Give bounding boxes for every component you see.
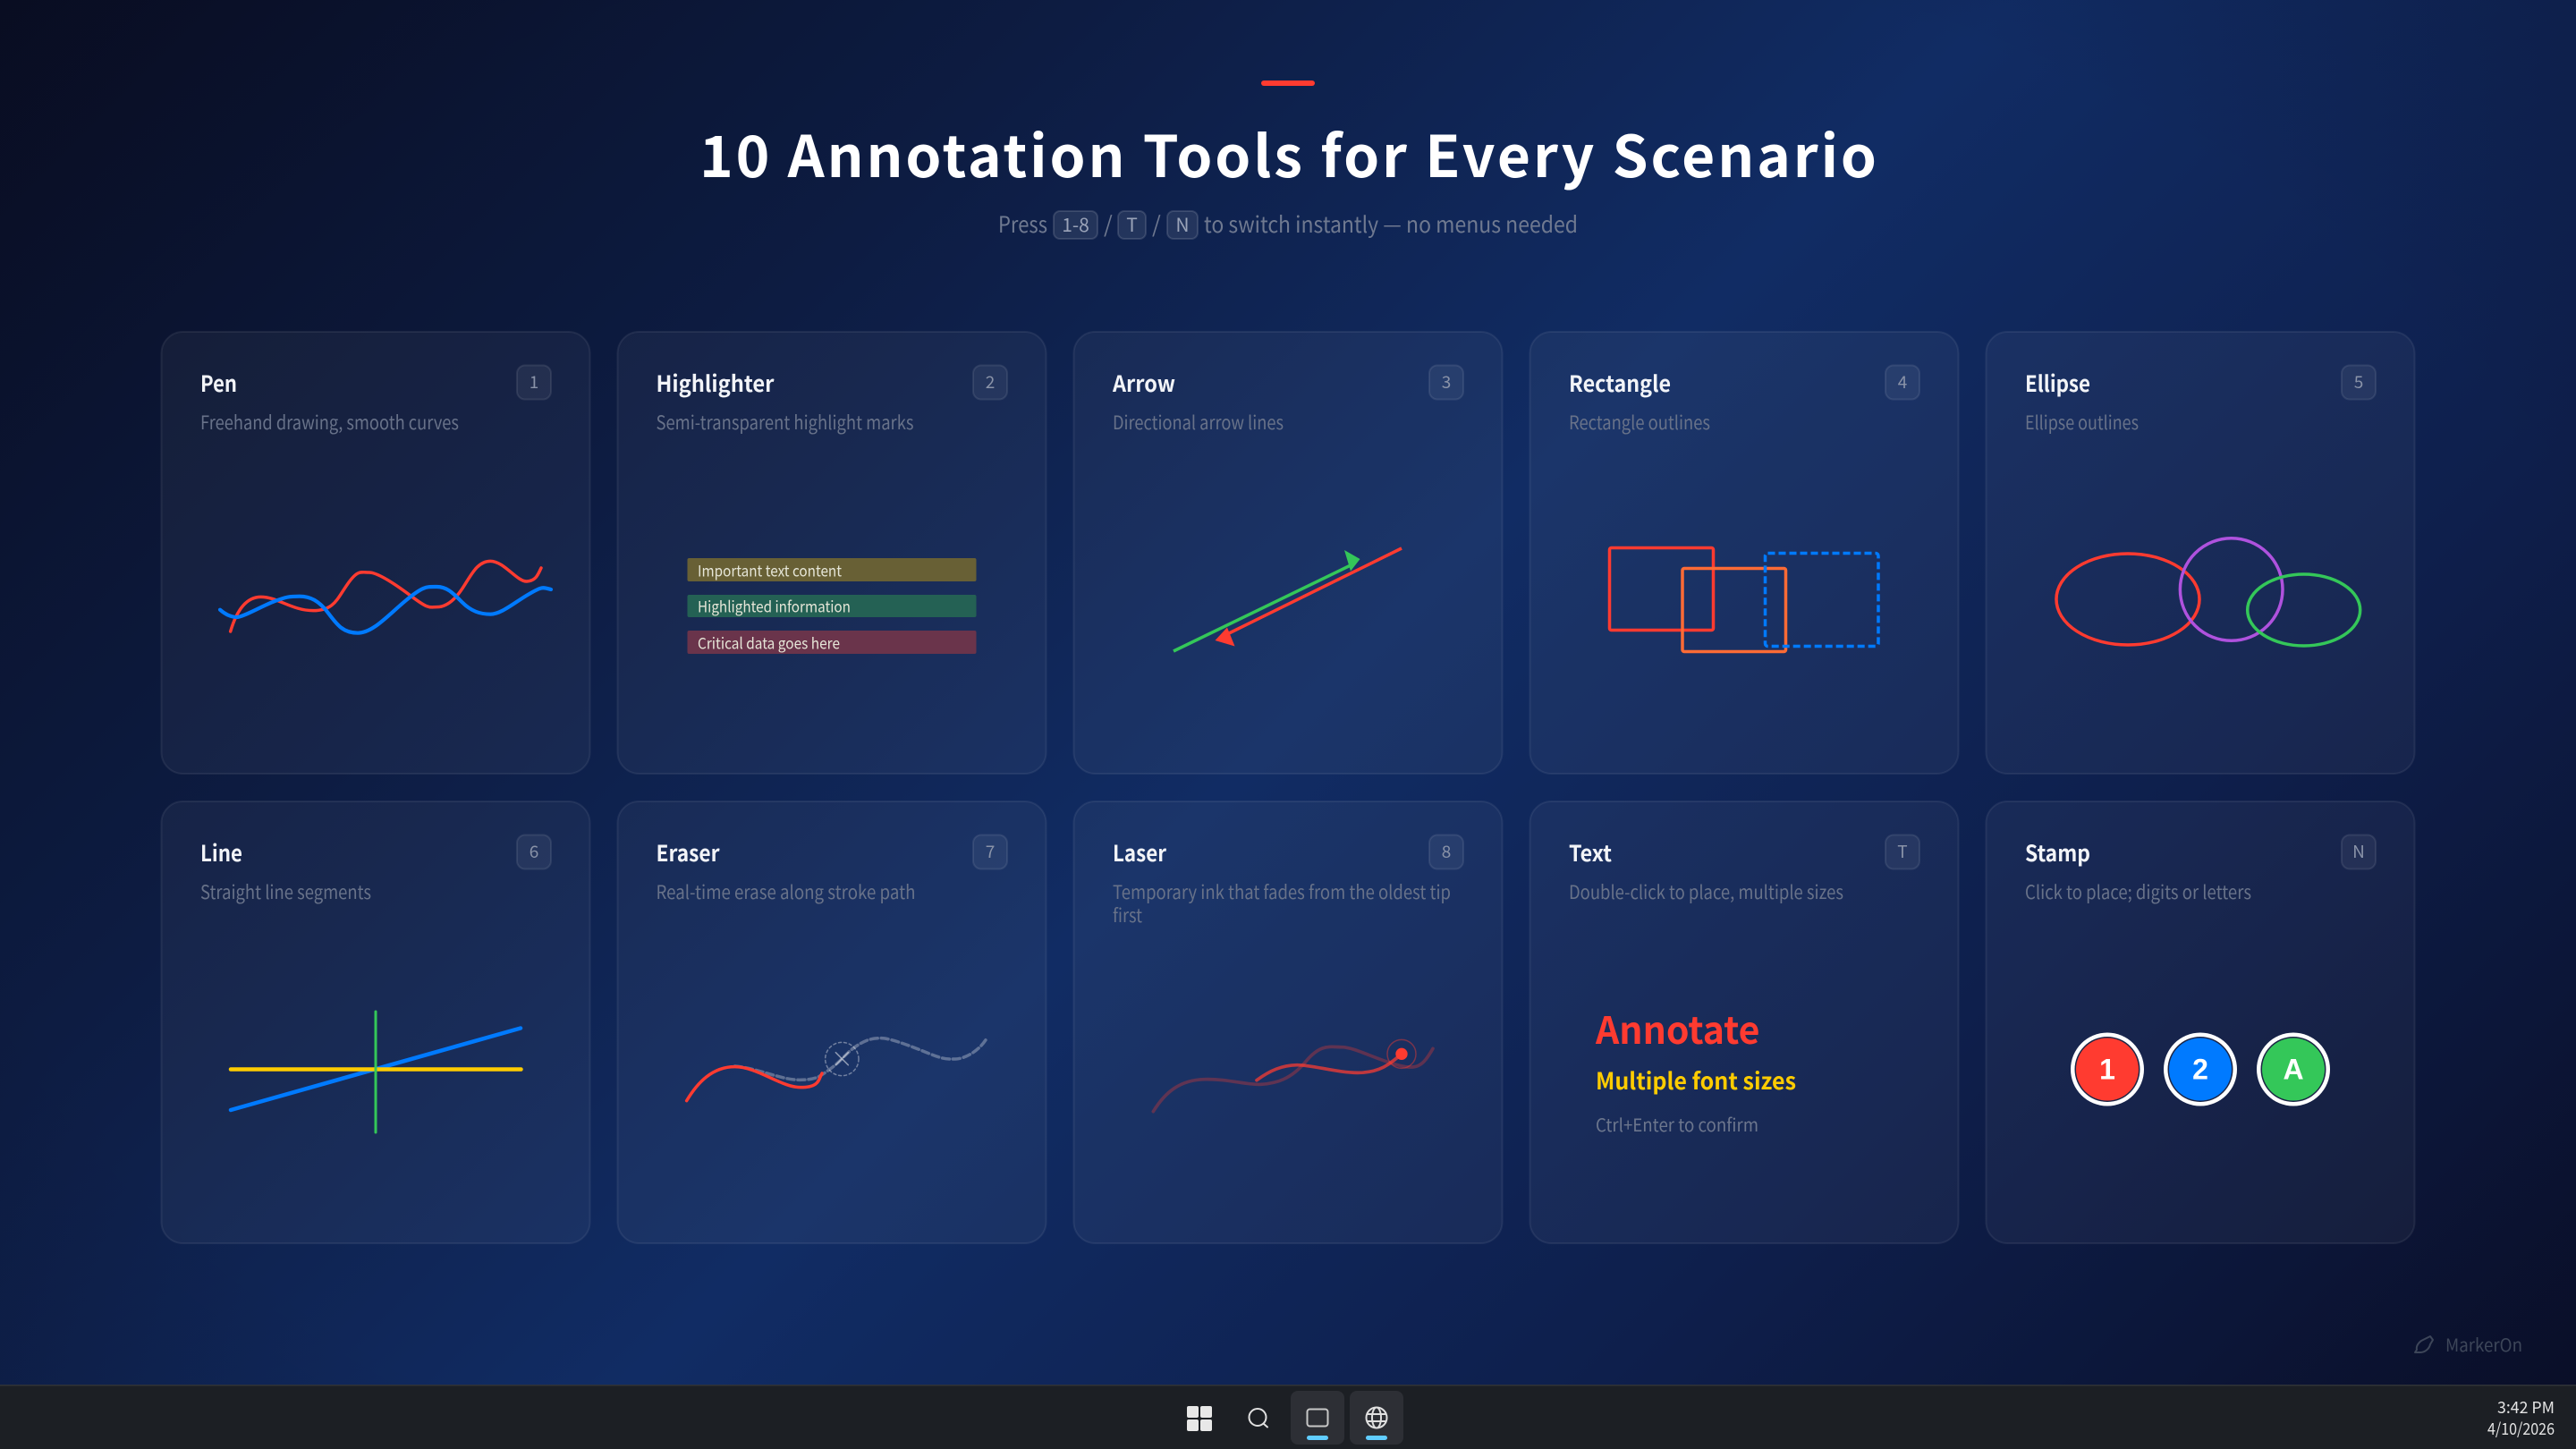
shape: dashed blue rectangle: [1766, 553, 1878, 646]
key badge: 5: [2342, 365, 2376, 399]
description: Laser: [1113, 878, 1451, 928]
key badge: 4: 4: [1898, 369, 1907, 394]
panel: Text: [1530, 801, 1959, 1243]
subtitle with key hints: [998, 208, 1578, 240]
sample: Annotate: Annotate: [1595, 1001, 1760, 1055]
heading: Stamp: Stamp: [2025, 836, 2090, 869]
clock: 4/10/2026: [2487, 1417, 2555, 1440]
description: Eraser: Real-time erase along stroke path: [657, 878, 916, 905]
accent bar: [1261, 80, 1315, 86]
description: Laser: first: [1113, 902, 1142, 928]
stamp: A: A: [2283, 1054, 2304, 1086]
description: Arrow: Directional arrow lines: [1113, 409, 1284, 436]
key badge: 4: [1885, 365, 1919, 399]
key badge: 7: 7: [986, 839, 995, 863]
key badge: 6: 6: [530, 839, 538, 863]
key badge: T: [1885, 835, 1919, 869]
heading: Pen: Pen: [200, 367, 237, 399]
heading: Line: Line: [200, 836, 242, 869]
shape: red rectangle: [1610, 547, 1714, 630]
subtitle with key hints: T: [1126, 211, 1138, 238]
shape: red ellipse: [2056, 554, 2199, 645]
highlight bar: yellow: Important text content: [698, 558, 843, 581]
key badge: 1: 1: [530, 369, 538, 394]
heading: Highlighter: Highlighter: [657, 367, 775, 399]
key badge: 8: [1429, 835, 1463, 869]
panel: Line: [161, 801, 590, 1243]
stamp: 2: [2164, 1032, 2237, 1106]
panel: Stamp: [1986, 801, 2415, 1243]
panel: Highlighter: [617, 332, 1046, 774]
key badge: N: N: [2352, 839, 2365, 863]
arrow: red: [1215, 548, 1402, 646]
panel: Pen: [161, 332, 590, 774]
subtitle with key hints: to switch instantly — no menus needed: [1204, 208, 1578, 240]
panel: Ellipse: [1986, 332, 2415, 774]
highlight bar: green: Highlighted information: [698, 594, 851, 617]
key badge: 2: [973, 365, 1007, 399]
panel: Rectangle: [1530, 332, 1959, 774]
highlight bar: red: Critical data goes here: [698, 631, 840, 653]
stamp: A: [2257, 1032, 2330, 1106]
panel: Arrow: [1073, 332, 1503, 774]
panel: Eraser: [617, 801, 1046, 1243]
shape: purple circle: [2180, 538, 2283, 640]
highlight bar: red: [687, 631, 977, 654]
icon: start: [1187, 1406, 1212, 1431]
heading: Ellipse: Ellipse: [2025, 367, 2090, 399]
watermark: MarkerOn: [2415, 1331, 2522, 1357]
clock: 3:42 PM: [2497, 1395, 2555, 1419]
stamp: 1: [2071, 1032, 2144, 1106]
description: Line: Straight line segments: [200, 878, 371, 905]
description: Highlighter: Semi-transparent highlight marks: [657, 409, 914, 436]
shape: orange rectangle: [1682, 569, 1785, 651]
description: Pen: Freehand drawing, smooth curves: [200, 409, 459, 436]
icon: search: [1249, 1409, 1267, 1428]
taskbar: [0, 1385, 2576, 1449]
heading: Rectangle: Rectangle: [1569, 367, 1671, 399]
subtitle with key hints: Press: [998, 208, 1047, 240]
subtitle with key hints: 1-8: [1062, 211, 1089, 238]
heading: Arrow: Arrow: [1112, 367, 1175, 399]
clock: [2487, 1395, 2555, 1440]
title: 10 Annotation Tools for Every Scenario: [699, 112, 1877, 194]
description: Laser: Temporary ink that fades from the oldest tip: [1113, 878, 1451, 905]
key badge: 3: [1429, 365, 1463, 399]
taskbar button: window: [1291, 1391, 1344, 1445]
key badge: N: [2342, 835, 2376, 869]
heading: Text: Text: [1569, 836, 1612, 869]
heading: Laser: Laser: [1113, 836, 1166, 869]
key badge: 2: 2: [986, 369, 995, 394]
sample: Multiple font sizes: Multiple font sizes: [1596, 1063, 1796, 1097]
description: Stamp: Click to place; digits or letters: [2025, 878, 2251, 905]
subtitle with key hints: N: [1175, 211, 1190, 238]
key badge: 1: [517, 365, 551, 399]
stamp: 2: 2: [2192, 1054, 2208, 1086]
subtitle with key hints: /: [1104, 208, 1113, 240]
illustration: eraser stroke: [687, 1038, 987, 1101]
key badge: 6: [517, 835, 551, 869]
stamp: 1: 1: [2099, 1054, 2115, 1086]
sample: Ctrl+Enter to confirm: Ctrl+Enter to confirm: [1596, 1111, 1758, 1137]
heading: Eraser: Eraser: [657, 836, 720, 869]
description: Ellipse: Ellipse outlines: [2025, 409, 2139, 436]
description: Rectangle: Rectangle outlines: [1569, 409, 1710, 436]
key badge: T: T: [1897, 839, 1908, 863]
chart: crossing lines: [231, 1012, 521, 1132]
watermark: MarkerOn: MarkerOn: [2445, 1331, 2522, 1357]
key badge: 3: 3: [1442, 369, 1451, 394]
subtitle with key hints: /: [1152, 208, 1161, 240]
highlight bar: yellow: [687, 558, 977, 581]
illustration: laser trail: [1153, 1039, 1433, 1112]
description: Text: Double-click to place, multiple sizes: [1569, 878, 1843, 905]
key badge: 5: 5: [2354, 369, 2363, 394]
chart: pen curves: [220, 561, 551, 633]
shape: green ellipse: [2248, 574, 2360, 646]
key badge: 7: [973, 835, 1007, 869]
taskbar button: globe: [1350, 1391, 1403, 1445]
arrow: green: [1174, 550, 1360, 651]
key badge: 8: 8: [1442, 839, 1451, 863]
highlight bar: green: [687, 594, 977, 617]
panel: Laser: [1073, 801, 1503, 1243]
